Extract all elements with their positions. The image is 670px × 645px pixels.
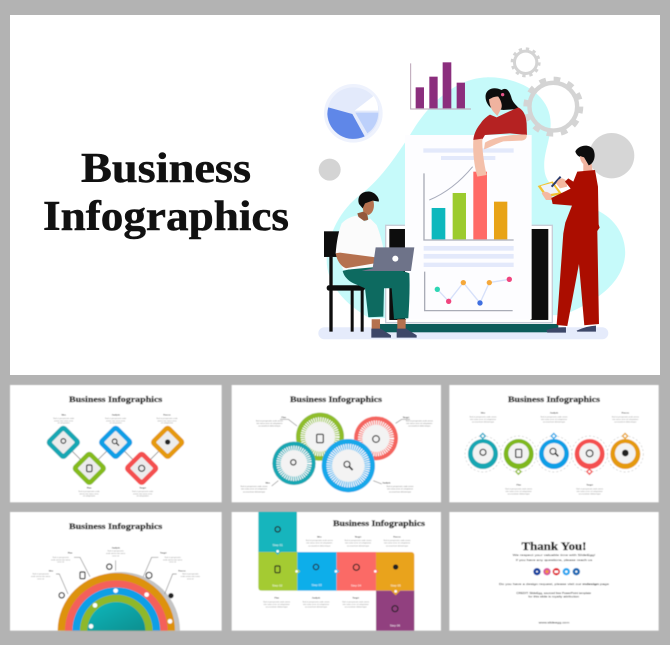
labels: bottom: iste natus error sit voluptatem [343, 603, 369, 606]
labels: bottom: accusantium doloremque [305, 606, 328, 609]
thank you heading: Thank You! [521, 539, 586, 553]
person: man holding clipboard [538, 146, 600, 333]
labels: top: iste natus error sit voluptatem [384, 542, 410, 545]
step: idea [45, 414, 82, 461]
panel: slide 4 timeline circles [449, 385, 659, 502]
connector markers [274, 550, 400, 595]
step: analysis: sit voluptatem [110, 422, 122, 425]
callouts: iste natus error sit voluptatem [387, 488, 413, 491]
labels: top: Sed ut perspiciatis unde omnis [306, 539, 333, 542]
callouts: Sed ut perspiciatis [182, 573, 198, 576]
callouts: Sed ut perspiciatis [108, 550, 124, 553]
step: process: sit voluptatem [161, 422, 173, 425]
block: step 05: Step 05 [391, 584, 401, 588]
gear: small [512, 49, 539, 76]
back screen frame [378, 225, 558, 332]
callouts: error sit [169, 561, 176, 564]
callouts: iste natus error sit voluptatem [406, 422, 433, 425]
callouts: error sit [187, 577, 194, 580]
design request note: Do you have a design request, please visit our mdesign page [499, 582, 609, 586]
step: target: omnis iste natus error [133, 492, 153, 495]
step: analysis: Sed ut perspiciatis unde omnis [540, 415, 568, 418]
circle: idea [272, 442, 316, 485]
document line chart [425, 272, 513, 311]
step: process: accusantium doloremque [614, 421, 637, 424]
callouts: Plan [281, 416, 287, 419]
step: plan [71, 450, 108, 498]
step: target [572, 436, 608, 496]
step: analysis: omnis iste natus error [106, 419, 126, 422]
block: step 03 [297, 552, 337, 591]
step: plan: iste natus error sit voluptatem [506, 490, 532, 493]
callouts: Sed ut perspiciatis [165, 556, 181, 559]
step: analysis: Analysis [111, 413, 120, 416]
document bar chart [424, 167, 514, 240]
callouts: error sit [37, 577, 44, 580]
callouts: error sit [57, 561, 64, 564]
step: plan [501, 436, 537, 496]
thank you message: We respect your valuable time with SlideEgg! [513, 553, 596, 557]
callouts: error sit [112, 554, 119, 557]
panel: slide 3 overlapping circles [232, 385, 441, 502]
step: target: Sed ut perspiciatis unde omnis [576, 487, 603, 490]
block: step 02: Step 02 [272, 584, 283, 588]
callouts: Analysis [111, 546, 120, 549]
step: process: iste natus error sit voluptatem [612, 418, 639, 421]
step: plan: sit voluptatem [83, 495, 95, 498]
callouts: Target [160, 552, 167, 555]
callouts: Analysis [382, 481, 391, 484]
step: process: Sed ut perspiciatis unde [156, 417, 178, 420]
grey circle: left [319, 159, 341, 181]
slide heading: Business Infographics [69, 522, 162, 531]
block: step 05 [376, 552, 414, 591]
step: idea: sit voluptatem [58, 422, 70, 425]
step: target: sit voluptatem [137, 495, 149, 498]
labels: bottom: iste natus error sit voluptatem [264, 603, 290, 606]
block: step 04 [337, 552, 376, 591]
labels: top: iste natus error sit voluptatem [306, 542, 333, 545]
labels: top: Process [393, 535, 401, 538]
callouts: iste natus error sit voluptatem [256, 422, 283, 425]
callouts: Sed ut perspiciatis unde omnis [406, 419, 433, 422]
step: analysis: Sed ut perspiciatis unde [105, 417, 127, 420]
cyan blob background [327, 77, 625, 318]
callouts: Sed ut perspiciatis [53, 556, 69, 559]
block: step 06 [376, 591, 414, 631]
step: idea: iste natus error sit voluptatem [470, 418, 496, 421]
slide heading: Business Infographics [290, 395, 382, 404]
labels: bottom: accusantium doloremque [345, 606, 368, 609]
labels: bottom: Sed ut perspiciatis unde omnis [263, 600, 290, 603]
callouts: Idea [49, 569, 54, 572]
step: analysis: iste natus error sit voluptatem [541, 418, 567, 421]
step: analysis: Analysis [550, 411, 558, 414]
callouts: Idea [265, 481, 271, 484]
slide heading: Business Infographics [333, 519, 425, 528]
illustration: business team with charts [318, 49, 634, 339]
labels: bottom: Plan [274, 596, 280, 599]
callouts: accusantium doloremque [389, 490, 412, 493]
callouts: unde omnis iste natus [181, 575, 200, 578]
step: idea: Idea [481, 411, 486, 414]
concentric arcs [58, 572, 180, 631]
block: step 02 [258, 552, 297, 591]
callouts: Target [403, 416, 409, 419]
labels: bottom: iste natus error sit voluptatem [303, 603, 329, 606]
credit note: for this slide is royalty attribution [528, 595, 579, 599]
credit note [516, 591, 591, 599]
panel: slide 2 diamond steps [10, 385, 222, 502]
callouts: accusantium doloremque [408, 425, 431, 428]
connectors [63, 442, 168, 468]
labels: bottom: Sed ut perspiciatis unde omnis [342, 600, 369, 603]
circle: target [354, 416, 398, 460]
step: plan: omnis iste natus error [79, 492, 99, 495]
grey circle: right [589, 133, 634, 178]
step: process: Sed ut perspiciatis unde omnis [612, 415, 639, 418]
website: www.slideegg.com [539, 621, 570, 625]
step: plan: accusantium doloremque [508, 493, 531, 496]
callouts: Sed ut perspiciatis unde omnis [240, 485, 268, 488]
step: idea: omnis iste natus error [54, 419, 74, 422]
title [43, 146, 289, 240]
block: step 03: Step 03 [312, 583, 322, 587]
panel: slide 7 thank you [449, 512, 659, 631]
block: step 01: Step 01 [273, 543, 283, 547]
person: woman leaning over report [473, 88, 527, 177]
step: process: omnis iste natus error [157, 419, 177, 422]
gear: large [526, 79, 581, 134]
slide heading: Business Infographics [508, 395, 600, 404]
credit note: CREDIT: SlideEgg, sourced free PowerPoint template [516, 591, 591, 595]
circle: analysis [322, 439, 375, 492]
block: step 04: Step 04 [351, 584, 361, 588]
step: idea [465, 411, 501, 472]
step: process: Process [163, 413, 171, 416]
step: target: accusantium doloremque [579, 493, 602, 496]
title: Business [81, 146, 251, 192]
step: target: Target [586, 483, 593, 486]
thank you message [513, 553, 596, 562]
step: idea: Sed ut perspiciatis unde omnis [469, 415, 497, 418]
step: target: Sed ut perspiciatis unde [132, 490, 154, 493]
step: target: iste natus error sit voluptatem [577, 490, 603, 493]
step: analysis: accusantium doloremque [543, 421, 566, 424]
step: plan: Plan [87, 487, 92, 490]
panel: slide 6 stepped blocks [232, 512, 441, 631]
step: process [149, 413, 186, 461]
panel: slide 5 semicircle layers [10, 512, 222, 631]
labels: top: accusantium doloremque [347, 544, 370, 547]
block: step 06: Step 06 [390, 624, 400, 628]
step: target: Target [139, 487, 146, 490]
thank you message: If you have any questions, please reach us [516, 558, 593, 562]
callouts: Sed ut perspiciatis unde omnis [386, 485, 413, 488]
labels: top: iste natus error sit voluptatem [345, 542, 371, 545]
callouts: accusantium doloremque [258, 425, 281, 428]
panel: main title slide [10, 15, 660, 375]
slide heading: Business Infographics [69, 395, 162, 404]
labels: bottom: Target [352, 596, 359, 599]
callouts: accusantium doloremque [243, 490, 266, 493]
labels: bottom: Sed ut perspiciatis unde omnis [302, 600, 330, 603]
step: plan: Sed ut perspiciatis unde omnis [505, 487, 532, 490]
callouts: iste natus error sit voluptatem [241, 488, 267, 491]
circle: plan [296, 413, 344, 461]
callouts [240, 416, 433, 493]
step: analysis [536, 411, 572, 472]
labels: top: Target [355, 535, 361, 538]
labels: top: Idea [317, 535, 322, 538]
callouts: Process [178, 569, 186, 572]
ground shadow [318, 327, 608, 339]
step: process [607, 411, 643, 472]
callouts: unde omnis iste natus [51, 558, 70, 561]
block: step 01 [258, 512, 297, 552]
step: idea: accusantium doloremque [472, 421, 495, 424]
labels: top: Sed ut perspiciatis unde omnis [344, 539, 372, 542]
chair [324, 231, 365, 332]
bar chart: purple [411, 62, 471, 109]
labels: top: Sed ut perspiciatis unde omnis [383, 539, 410, 542]
pie chart [324, 84, 383, 143]
social icons [533, 568, 580, 575]
step: process: Process [622, 411, 629, 414]
labels: top [306, 535, 410, 547]
callouts: Sed ut perspiciatis unde omnis [256, 419, 283, 422]
title: Infographics [43, 194, 289, 240]
callouts: unde omnis iste natus [163, 558, 182, 561]
person: seated man with laptop [336, 192, 417, 338]
callouts: unde omnis iste natus [31, 575, 50, 578]
callouts [31, 546, 200, 598]
step: idea: Idea [61, 414, 67, 417]
step: plan: Plan [516, 483, 522, 486]
labels: top: accusantium doloremque [308, 544, 331, 547]
step: analysis [97, 413, 134, 461]
labels: bottom [263, 596, 369, 609]
callouts: unde omnis iste natus [106, 552, 125, 555]
callouts: Plan [68, 552, 73, 555]
labels: top: accusantium doloremque [386, 544, 409, 547]
step: plan: Sed ut perspiciatis unde [78, 490, 100, 493]
step: idea: Sed ut perspiciatis unde [53, 417, 75, 420]
report document [405, 135, 532, 319]
callouts: Sed ut perspiciatis [33, 573, 49, 576]
labels: bottom: accusantium doloremque [266, 606, 289, 609]
labels: bottom: Analysis [312, 596, 320, 599]
step: target [123, 450, 160, 498]
